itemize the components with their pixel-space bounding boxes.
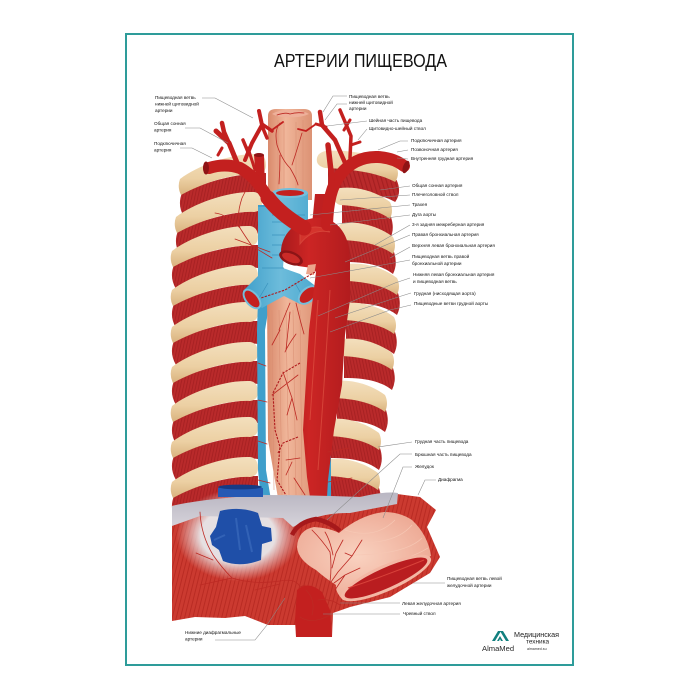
label: third intercostal: 3-я задняя межреберная артерия xyxy=(412,222,485,227)
vena cava highlights xyxy=(214,518,252,552)
label: lower left bronchial: и пищеводная ветвь xyxy=(413,279,457,284)
label: esophageal branch left: артерии xyxy=(155,108,173,113)
label: esophageal branch of right bronchial: бронхиальной артерии xyxy=(412,260,462,266)
intercostal arteries left xyxy=(215,182,352,483)
label: third intercostal xyxy=(375,222,485,245)
label: right bronchial: Правая бронхиальная артерия xyxy=(412,232,479,237)
label: lower left bronchial: Нижняя левая бронхиальная артерия xyxy=(413,272,495,277)
label: esophageal branch right xyxy=(323,94,393,120)
right hemiazygos vein xyxy=(327,445,331,497)
label: upper left bronchial xyxy=(390,243,495,258)
label: common carotid: Общая сонная артерия xyxy=(412,183,463,188)
label: esophageal branches of aorta: Пищеводные ветви грудной аорты xyxy=(414,300,489,306)
label: cervical esophagus xyxy=(327,117,423,126)
left gastric artery branches xyxy=(312,530,362,590)
label: common carotid left: артерия xyxy=(154,128,172,132)
esophageal branches of the thoracic aorta xyxy=(261,272,323,573)
aorta highlights xyxy=(300,227,330,470)
ligament stub xyxy=(306,264,316,275)
label: thoracic esophagus: Грудная часть пищевода xyxy=(415,439,469,444)
label: brachiocephalic trunk xyxy=(340,191,459,200)
logo: almamed.su xyxy=(527,647,547,651)
label: esophageal branch of left gastric: Пищеводная ветвь левой xyxy=(447,575,502,581)
diaphragm central tendon xyxy=(172,489,398,581)
label: upper left bronchial: Верхняя левая бронхиальная артерия xyxy=(412,243,495,248)
label: abdominal esophagus: Брюшная часть пищевода xyxy=(415,452,472,457)
label: esophageal branch left xyxy=(155,95,253,118)
logo: техника xyxy=(526,638,549,646)
diaphragmatic arteries xyxy=(196,512,305,590)
label: diaphragm xyxy=(418,477,463,495)
label: common carotid left: Общая сонная xyxy=(154,121,186,126)
esophagus lower xyxy=(267,295,318,498)
label: aortic arch xyxy=(330,212,437,225)
abdominal aorta xyxy=(295,585,340,637)
label: subclavian artery: Подключичная артерия xyxy=(411,138,462,143)
label: right bronchial xyxy=(345,232,479,262)
aortic arch cut end xyxy=(277,247,305,269)
label: inferior phrenic arteries xyxy=(185,598,285,642)
label: esophageal branch right: Пищеводная ветвь xyxy=(349,94,390,99)
label: aortic arch: Дуга аорты xyxy=(412,212,437,217)
label: stomach: Желудок xyxy=(415,464,435,469)
frame xyxy=(126,34,573,665)
label: esophageal branch of left gastric xyxy=(413,575,502,588)
label: stomach xyxy=(383,464,435,518)
stomach xyxy=(297,512,436,610)
label: esophageal branch left: Пищеводная ветвь xyxy=(155,95,196,100)
label: esophageal branch of left gastric: желудочной артерии xyxy=(447,582,492,588)
label: esophageal branches of aorta xyxy=(330,300,489,332)
label: common carotid xyxy=(380,183,463,190)
label: thoracic esophagus xyxy=(378,439,469,447)
label: diaphragm: Диафрагма xyxy=(438,477,463,482)
title: АРТЕРИИ ПИЩЕВОДА xyxy=(274,50,448,71)
inferior vena cava xyxy=(210,509,272,564)
label: celiac trunk: Чревный ствол xyxy=(403,610,436,616)
label: inferior phrenic arteries: Нижние диафрагмальные xyxy=(185,630,241,635)
label: common carotid left xyxy=(154,121,228,143)
left ribs xyxy=(171,154,266,520)
label: abdominal esophagus xyxy=(327,452,472,520)
diaphragm muscle xyxy=(172,494,440,637)
label: subclavian artery xyxy=(378,138,462,150)
label: trachea: Трахея xyxy=(412,202,428,207)
label: subclavian left: артерия xyxy=(154,148,172,152)
hiatus ridge xyxy=(292,519,340,535)
label: brachiocephalic trunk: Плечеголовной ствол xyxy=(412,191,459,197)
label: inferior phrenic arteries: артерии xyxy=(185,636,203,642)
label: left gastric artery xyxy=(340,601,461,606)
label: thoracic aorta: Грудная (нисходящая аорта) xyxy=(414,291,476,296)
azygos vein xyxy=(257,205,271,500)
label: vertebral artery: Позвоночная артерия xyxy=(411,147,458,152)
label: subclavian left: Подключичная xyxy=(154,141,186,146)
label: esophageal branch right: нижней щитовидной xyxy=(349,99,393,105)
label: trachea xyxy=(310,202,428,215)
aorta xyxy=(281,218,350,497)
arteries on the upper esophagus xyxy=(276,123,302,185)
logo: AlmaMed xyxy=(482,644,514,653)
label: cervical esophagus: Шейная часть пищевода xyxy=(369,117,423,123)
logo: Медицинская xyxy=(514,630,559,639)
stump: right common carotid xyxy=(254,153,265,190)
label: thoracic aorta xyxy=(335,291,476,318)
band of inferior vena cava xyxy=(218,485,263,497)
left subclavian and branches xyxy=(298,110,411,225)
label: esophageal branch left: нижней щитовидной xyxy=(155,100,199,106)
label: internal thoracic artery: Внутренняя грудная артерия xyxy=(411,156,474,161)
brachiocephalic and subclavian right xyxy=(203,111,304,228)
label: esophageal branch of right bronchial: Пищеводная ветвь правой xyxy=(412,253,470,259)
label: thyrocervical trunk: Щитовидно-шейный ствол xyxy=(369,125,426,131)
right ribs xyxy=(317,151,400,510)
label: left gastric artery: Левая желудочная артерия xyxy=(402,601,461,606)
label: esophageal branch of right bronchial xyxy=(310,253,470,278)
stump: left common carotid xyxy=(312,194,330,225)
esophagus upper xyxy=(268,109,312,200)
label: celiac trunk xyxy=(323,610,436,616)
label: subclavian left xyxy=(154,141,212,158)
label: thyrocervical trunk xyxy=(358,125,426,140)
label: esophageal branch right: артерии xyxy=(349,106,367,111)
logo xyxy=(482,630,559,653)
trachea and bronchi xyxy=(239,188,322,313)
label: lower left bronchial xyxy=(318,272,495,316)
